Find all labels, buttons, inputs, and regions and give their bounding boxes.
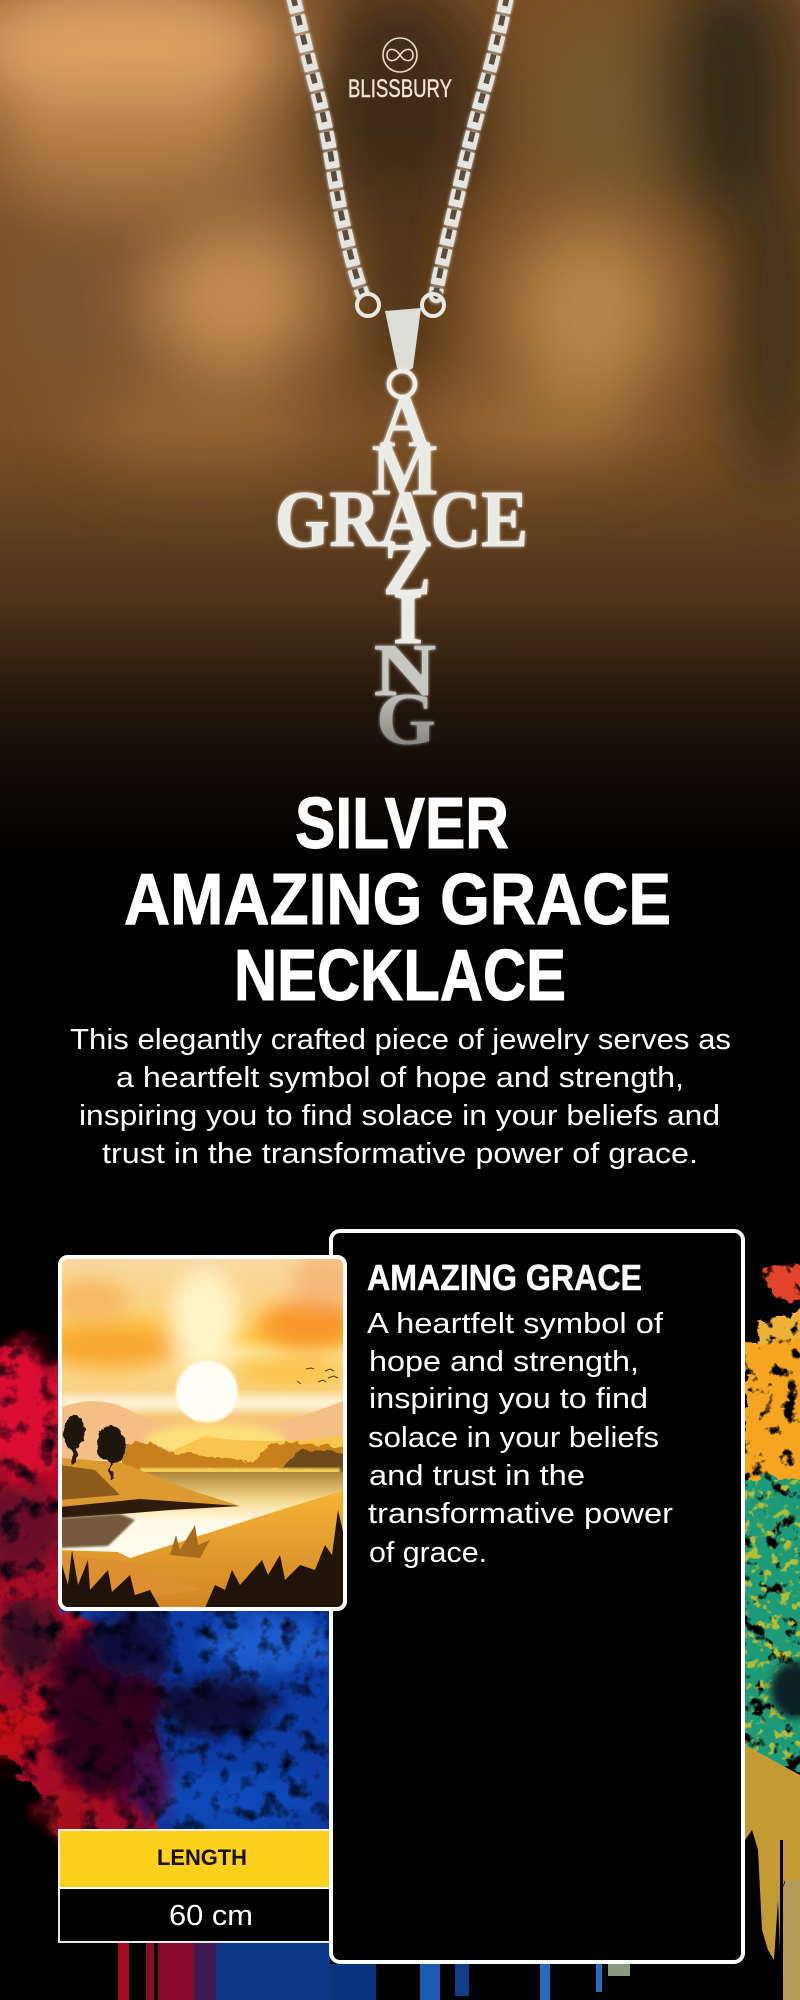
card text: of grace. — [369, 1537, 487, 1569]
intro paragraph: inspiring you to find solace in your beliefs and — [79, 1100, 720, 1132]
birds — [297, 1368, 338, 1384]
card text: hope and strength, — [369, 1346, 639, 1378]
pendant: cross of words AMAZING and GRACE: A — [380, 481, 430, 561]
paint splash: right multicolour strip — [740, 1262, 800, 2000]
value: 60 cm — [169, 1900, 253, 1932]
pendant: cross of words AMAZING and GRACE: A — [380, 382, 430, 462]
intro paragraph — [70, 1024, 731, 1170]
necklace: bail and rings — [357, 294, 444, 397]
card text: solace in your beliefs — [368, 1422, 659, 1454]
pendant: cross of words AMAZING and GRACE: N — [374, 630, 436, 712]
pendant: cross of words AMAZING and GRACE: I — [393, 578, 423, 660]
card text: A heartfelt symbol of — [367, 1308, 664, 1340]
foreground grass — [62, 1550, 160, 1608]
pendant: cross of words AMAZING and GRACE — [275, 382, 528, 761]
card text: inspiring you to find — [369, 1383, 648, 1415]
paint splash: bottom drips — [118, 1943, 630, 2000]
card text: transformative power — [368, 1498, 673, 1530]
intro paragraph: a heartfelt symbol of hope and strength, — [116, 1062, 684, 1094]
intro paragraph: This elegantly crafted piece of jewelry serves as — [70, 1024, 731, 1056]
paint splash: left red and blue — [0, 1345, 345, 1840]
title: NECKLACE — [234, 936, 566, 1016]
card text — [367, 1308, 673, 1569]
illustration: sunset landscape — [40, 1254, 360, 1611]
trees — [63, 1412, 126, 1480]
panel: description card — [331, 1231, 743, 1962]
panel: hero photo background — [0, 0, 800, 880]
card heading: AMAZING GRACE — [367, 1257, 642, 1298]
spec table: length — [58, 1829, 329, 1943]
necklace: chain left — [293, 0, 363, 295]
pendant: cross of words AMAZING and GRACE: G — [376, 679, 436, 761]
necklace: chain right — [436, 0, 507, 296]
title: AMAZING GRACE — [124, 860, 671, 940]
card text: and trust in the — [369, 1460, 585, 1492]
intro paragraph: trust in the transformative power of grace. — [102, 1138, 698, 1170]
label: LENGTH — [157, 1845, 247, 1870]
logo: Blissbury — [348, 38, 452, 103]
pendant: cross of words AMAZING and GRACE: GRACE — [275, 476, 528, 564]
pendant: cross of words AMAZING and GRACE: M — [372, 430, 438, 510]
title — [124, 784, 671, 1016]
title: SILVER — [295, 784, 509, 864]
logo: Blissbury: BLISSBURY — [348, 75, 452, 103]
pendant: cross of words AMAZING and GRACE: Z — [383, 529, 431, 611]
